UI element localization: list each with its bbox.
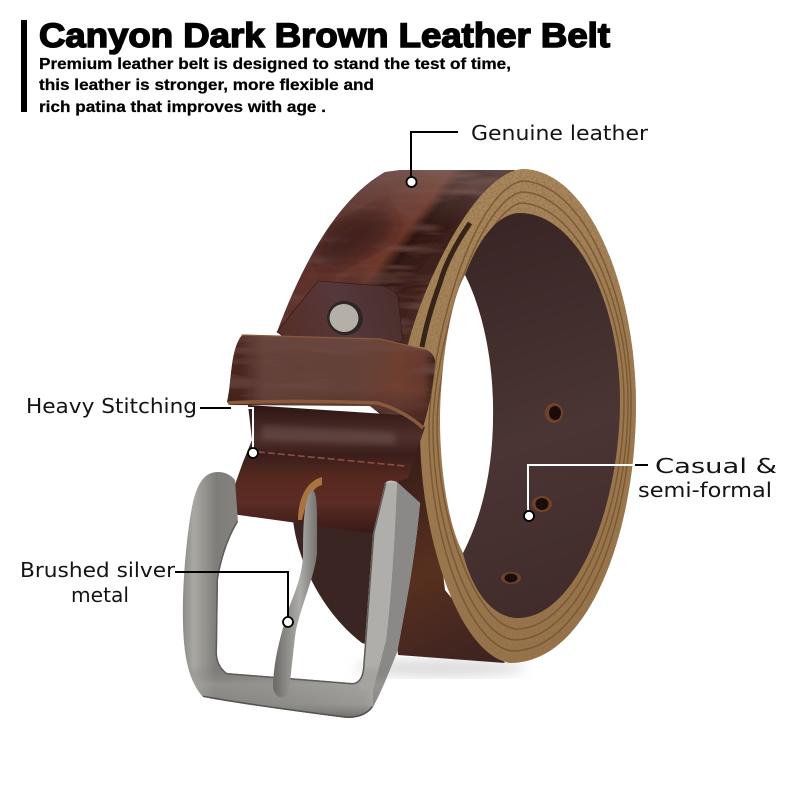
- callout: brushed silver metal: Brushed silver: [20, 558, 176, 582]
- belt photo illustration: [175, 165, 636, 725]
- callout: casual and semi-formal: [524, 454, 777, 521]
- belt edge rim: [408, 169, 636, 663]
- outer belt face: [277, 170, 515, 416]
- accent bar: [21, 20, 27, 112]
- stitching: [248, 451, 405, 466]
- title: Canyon Dark Brown Leather Belt: [39, 17, 610, 55]
- callout: genuine leather: Genuine leather: [471, 121, 649, 145]
- keeper loop: [227, 335, 435, 428]
- belt holes: [501, 403, 563, 584]
- strap highlight: [262, 425, 395, 445]
- buckle frame: [182, 472, 420, 718]
- description text: Premium leather belt is designed to stand the test of time,: [39, 56, 511, 73]
- opening through belt loop: [440, 275, 493, 553]
- description text: this leather is stronger, more flexible and: [39, 77, 374, 94]
- lower strap: [230, 405, 425, 534]
- callout: heavy stitching: [26, 394, 258, 458]
- callout: casual and semi-formal: semi-formal: [638, 478, 772, 502]
- callout: genuine leather: [406, 121, 649, 187]
- rivet tab: [277, 281, 403, 342]
- ground shadow: [355, 659, 525, 677]
- strap slot: [298, 477, 322, 520]
- description text: rich patina that improves with age .: [39, 99, 326, 116]
- inner leather surface: [463, 213, 620, 618]
- inner strap behind buckle: [293, 520, 385, 650]
- callout: casual and semi-formal: Casual &: [655, 454, 777, 478]
- buckle prong: [273, 490, 317, 697]
- rivet: [323, 297, 367, 339]
- callout: brushed silver metal: metal: [71, 583, 129, 607]
- callout: heavy stitching: Heavy Stitching: [26, 394, 197, 418]
- lower belt face: [385, 430, 505, 663]
- description text: [39, 56, 511, 116]
- callout: brushed silver metal: [20, 558, 293, 627]
